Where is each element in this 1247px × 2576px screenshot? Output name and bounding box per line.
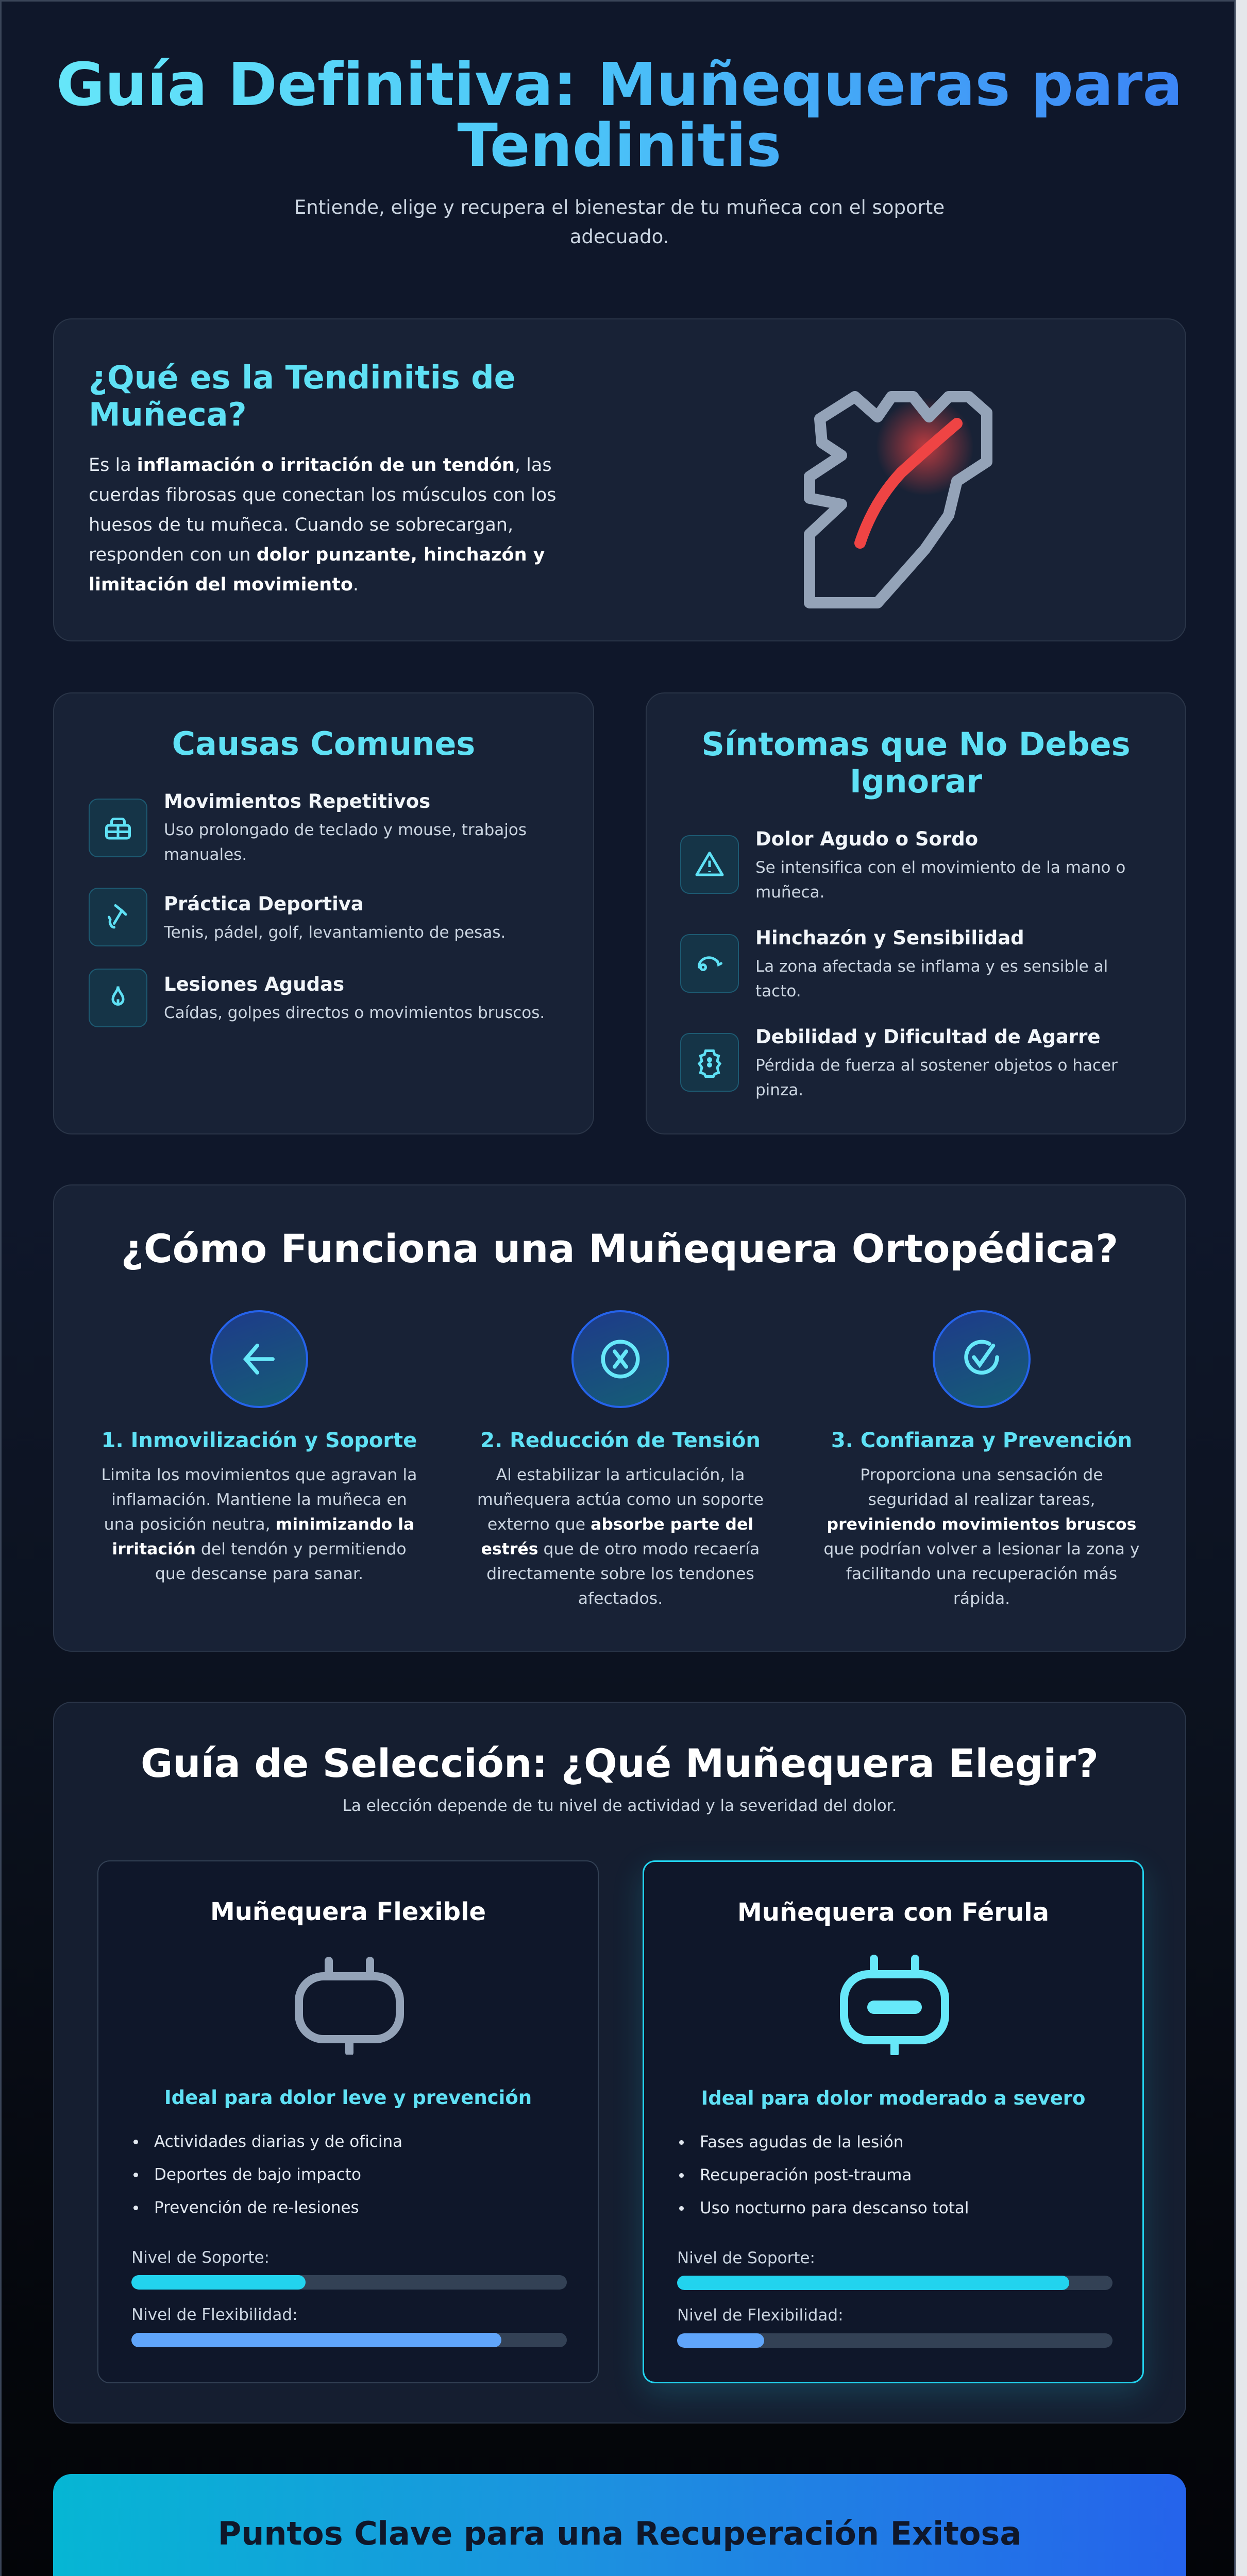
card: splint: Ideal para dolor moderado a severo	[701, 2087, 1085, 2109]
title: Guía Definitiva: Muñequeras para	[56, 50, 1183, 120]
cause: sport: Práctica Deportiva	[164, 893, 364, 915]
card: flexible: Nivel de Soporte:	[131, 2248, 269, 2267]
subtitle: Entiende, elige y recupera el bienestar de tu muñeca con el soporte adecuado.	[294, 196, 945, 248]
title	[32, 55, 1206, 176]
card: splint: Fases agudas de la lesión	[700, 2133, 903, 2151]
step 2 title: 2. Reducción de Tensión	[480, 1429, 761, 1452]
icon: confidence	[933, 1310, 1031, 1408]
symptom: pain	[755, 828, 1125, 902]
card: flexible: Actividades diarias y de oficina	[154, 2132, 402, 2151]
cause: repetitive: Uso prolongado de teclado y mouse, trabajos manuales.	[164, 821, 527, 864]
card: flexible: Nivel de Flexibilidad:	[131, 2306, 298, 2324]
icon: keyboard	[89, 799, 147, 857]
card: flexible: Prevención de re-lesiones	[154, 2198, 359, 2217]
step 3 text: Proporciona una sensación de seguridad al realizar tareas, previniendo movimientos bruscos que podrían volver a lesionar la zona y facilitando una recuperación más rápida.	[823, 1466, 1140, 1608]
panel: how it works	[53, 1184, 1186, 1652]
card: splint: Uso nocturno para descanso total	[700, 2199, 969, 2217]
cause: sport: Tenis, pádel, golf, levantamiento de pesas.	[164, 923, 505, 942]
icon: flexible brace	[295, 1957, 404, 2055]
step 1 title: 1. Inmovilización y Soporte	[102, 1429, 417, 1452]
step 2 text: Al estabilizar la articulación, la muñequera actúa como un soporte externo que absorbe parte del estrés que de otro modo recaería directamente sobre los tendones afectados.	[477, 1466, 764, 1608]
card: splint: Muñequera con Férula	[737, 1898, 1049, 1927]
panel: key points	[53, 2474, 1186, 2576]
panel: symptoms	[646, 692, 1186, 1134]
cause: repetitive	[164, 790, 527, 864]
heading: symptoms: Ignorar	[850, 762, 982, 800]
heading: how it works: ¿Cómo Funciona una Muñequera Ortopédica?	[121, 1226, 1118, 1272]
step 3 title: 3. Confianza y Prevención	[831, 1429, 1132, 1452]
icon: inflamed wrist	[804, 391, 992, 608]
card: splint	[643, 1860, 1144, 2383]
panel: what is tendinitis	[53, 318, 1186, 641]
cause: sport	[164, 893, 505, 942]
heading: symptoms	[701, 725, 1131, 800]
symptom: weakness: Pérdida de fuerza al sostener objetos o hacer pinza.	[755, 1056, 1118, 1099]
card: flexible: Ideal para dolor leve y prevención	[164, 2087, 532, 2109]
icon: swelling	[680, 934, 739, 993]
subtitle: selection: La elección depende de tu nivel de actividad y la severidad del dolor.	[343, 1797, 897, 1815]
icon: warning	[680, 835, 739, 894]
heading: key points: Puntos Clave para una Recuperación Exitosa	[218, 2515, 1021, 2552]
text block: definition: Es la inflamación o irritación de un tendón, las cuerdas fibrosas que conectan los músculos con los huesos de tu muñeca. Cuando se sobrecargan, responden con un dolor punzante, hinchazón y limitación del movimiento.	[89, 455, 557, 595]
icon: injury	[89, 969, 147, 1027]
icon: immobilization	[210, 1310, 308, 1408]
bar: flexibility flexible	[131, 2333, 567, 2347]
heading: selection guide: Guía de Selección: ¿Qué Muñequera Elegir?	[141, 1740, 1099, 1786]
symptom: pain: Se intensifica con el movimiento de la mano o muñeca.	[755, 858, 1125, 902]
card: splint: Nivel de Soporte:	[677, 2249, 815, 2267]
cause: acute injuries: Lesiones Agudas	[164, 973, 344, 995]
bar: flexibility splint	[677, 2333, 1113, 2348]
icon: weakness	[680, 1033, 739, 1092]
card: flexible: Muñequera Flexible	[210, 1897, 486, 1926]
icon: tension reduction	[571, 1310, 669, 1408]
bar: support flexible	[131, 2275, 567, 2290]
icon: splint brace	[840, 1955, 949, 2055]
title: Tendinitis	[458, 111, 781, 180]
step 1 text: Limita los movimientos que agravan la inflamación. Mantiene la muñeca en una posición neutra, minimizando la irritación del tendón y permitiendo que descanse para sanar.	[102, 1466, 417, 1583]
symptom: swelling: Hinchazón y Sensibilidad	[755, 927, 1024, 949]
card: splint: Recuperación post-trauma	[700, 2166, 912, 2184]
heading: symptoms: Síntomas que No Debes	[701, 725, 1131, 763]
card: splint: Nivel de Flexibilidad:	[677, 2306, 844, 2325]
panel: selection guide	[53, 1702, 1186, 2424]
card: flexible: Deportes de bajo impacto	[154, 2165, 361, 2184]
card: flexible	[97, 1860, 599, 2383]
cause: acute injuries: Caídas, golpes directos o movimientos bruscos.	[164, 1004, 545, 1022]
symptom: weakness	[755, 1026, 1118, 1099]
cause: repetitive: Movimientos Repetitivos	[164, 790, 430, 812]
bar: support splint	[677, 2276, 1113, 2290]
heading: what is: ¿Qué es la Tendinitis de Muñeca?	[89, 359, 516, 433]
symptom: swelling	[755, 927, 1108, 1001]
heading: causes: Causas Comunes	[172, 725, 475, 762]
symptom: pain: Dolor Agudo o Sordo	[755, 828, 978, 850]
symptom: weakness: Debilidad y Dificultad de Agarre	[755, 1026, 1100, 1048]
icon: sport	[89, 888, 147, 946]
panel: causes	[53, 692, 594, 1134]
symptom: swelling: La zona afectada se inflama y es sensible al tacto.	[755, 957, 1108, 1001]
cause: acute injuries	[164, 973, 545, 1022]
